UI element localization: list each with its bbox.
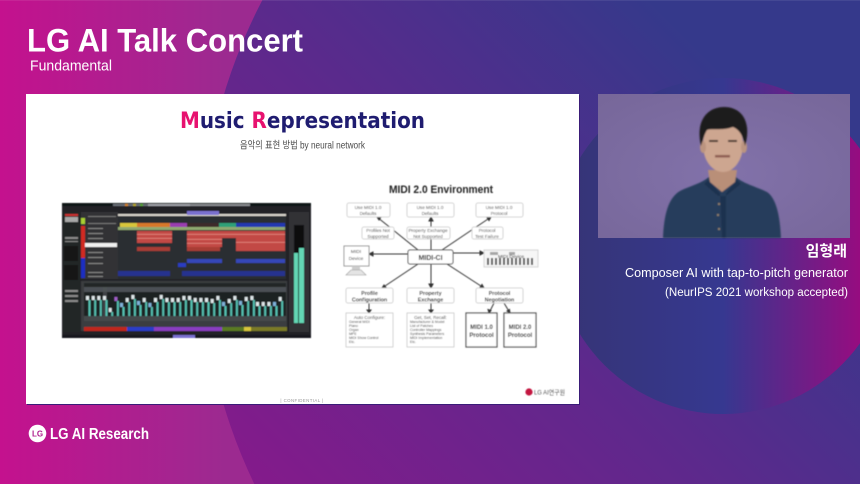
title: LG AI Talk Concert	[27, 22, 303, 58]
upper box labels: Use MIDI 1.0	[355, 205, 382, 210]
speaker video	[598, 94, 850, 238]
chart: MIDI 2.0 environment diagram: MIDI 2.0 Environment	[389, 184, 493, 196]
upper box labels: Not Supported	[413, 234, 443, 239]
icon: keyboard	[484, 250, 538, 267]
arrows	[367, 217, 510, 313]
footer logo	[29, 425, 149, 443]
icon: computer: Device	[349, 256, 364, 262]
upper box labels: Protocol	[491, 211, 507, 216]
mixer	[81, 281, 287, 331]
subtitle: Fundamental	[30, 58, 112, 74]
slide heading: Music Representation	[180, 109, 425, 134]
footer logo: LG AI Research	[50, 426, 149, 443]
slide subheading: 음악의 표현 방법 by neural network	[240, 140, 366, 152]
track list	[81, 212, 118, 279]
chart: MIDI 2.0 environment diagram	[344, 184, 538, 347]
detail lists: Organ	[349, 328, 359, 332]
upper box labels: Profiles Not	[366, 228, 391, 233]
speaker name: 임형래	[806, 243, 847, 260]
protocol boxes: MIDI 1.0	[470, 325, 493, 331]
speaker portrait	[663, 107, 781, 238]
lower row labels: Exchange	[418, 298, 443, 304]
DAW screenshot	[62, 203, 311, 338]
speaker note: (NeurIPS 2021 workshop accepted)	[665, 287, 848, 299]
detail lists: Piano	[349, 324, 358, 328]
icon: computer	[344, 246, 369, 275]
upper box labels: Test Failure	[475, 234, 499, 239]
upper box labels: Protocol	[479, 228, 495, 233]
slide logo	[525, 388, 565, 396]
detail lists: List of Patches	[410, 324, 433, 328]
detail lists: MIDI Implementation	[410, 336, 442, 340]
detail lists	[349, 315, 447, 344]
diagram boxes	[346, 203, 523, 347]
slide logo: LG AI연구원	[534, 388, 565, 396]
upper box labels: Use MIDI 1.0	[486, 205, 513, 210]
icon: computer: MIDI	[351, 249, 361, 255]
upper box labels: Use MIDI 1.0	[417, 205, 444, 210]
confidential note: | CONFIDENTIAL |	[280, 398, 324, 403]
protocol boxes: Protocol	[469, 333, 494, 339]
upper box labels: Defaults	[422, 211, 439, 216]
footer logo: LG	[32, 430, 43, 438]
master meter	[289, 212, 309, 332]
detail lists: Synthesis Parameters	[410, 332, 444, 336]
lower row labels: Protocol	[489, 291, 511, 297]
detail lists: MIDI Show Control	[349, 336, 379, 340]
icon: keyboard: MIDI Device	[498, 254, 524, 260]
arrangement clips	[118, 211, 286, 279]
detail lists: MPE	[349, 332, 357, 336]
lower row labels	[352, 291, 514, 304]
detail lists: Manufacturer & Model	[410, 320, 445, 324]
detail lists: Controller Mappings	[410, 328, 442, 332]
protocol boxes: Protocol	[508, 333, 532, 339]
speaker talk title: Composer AI with tap-to-pitch generator	[625, 265, 849, 280]
upper box labels: Defaults	[360, 211, 377, 216]
detail lists: Etc.	[349, 340, 355, 344]
MIDI-CI hub: MIDI-CI	[418, 255, 443, 262]
upper box labels	[355, 205, 513, 239]
lower row labels: Configuration	[352, 298, 387, 304]
panel: presentation slide	[26, 94, 580, 405]
protocol boxes: MIDI 2.0	[509, 325, 532, 331]
detail lists: Auto Configure:	[354, 315, 385, 320]
detail lists: Get, Set, Recall:	[414, 315, 447, 320]
lower row labels: Property	[419, 291, 442, 297]
detail lists: General MIDI	[349, 320, 370, 324]
MIDI-CI hub	[408, 250, 453, 264]
upper box labels: Property Exchange	[408, 228, 448, 233]
detail lists: Etc.	[410, 340, 416, 344]
lower row labels: Negotiation	[485, 298, 514, 304]
upper box labels: Supported	[367, 234, 389, 239]
protocol boxes	[466, 313, 536, 347]
lower row labels: Profile	[361, 291, 378, 297]
